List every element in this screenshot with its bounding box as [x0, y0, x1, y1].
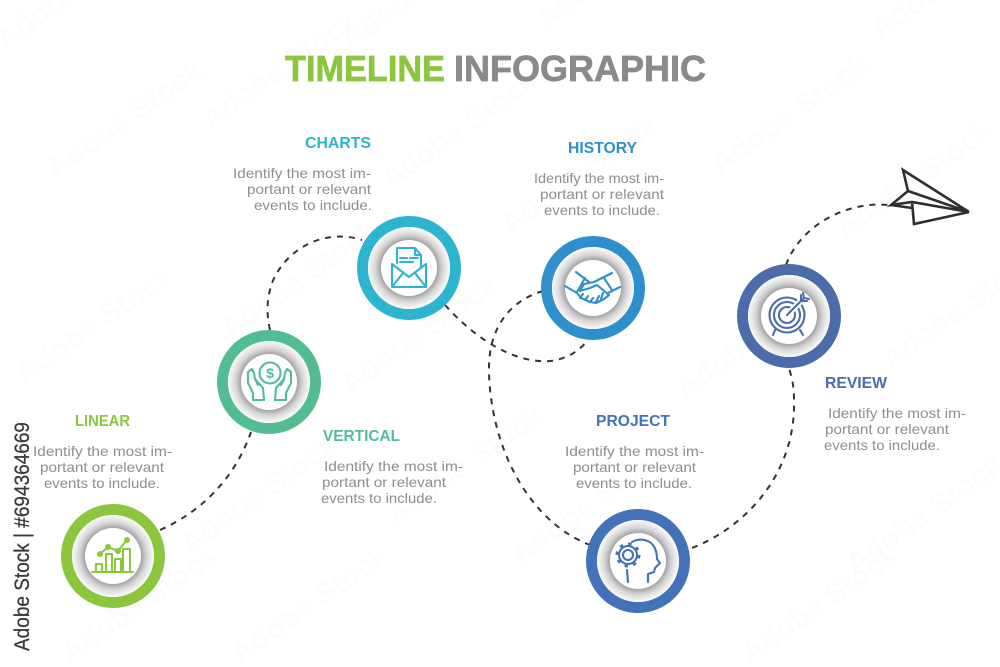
title: INFOGRAPHIC	[454, 48, 706, 89]
heading: vertical: VERTICAL	[323, 428, 400, 445]
ring: vertical	[222, 336, 316, 428]
text block: review: events to include.	[824, 437, 940, 453]
text: Adobe Stock	[215, 213, 384, 346]
step: linear	[33, 413, 172, 602]
icon: envelope with letter	[392, 248, 426, 287]
text block: vertical	[321, 458, 463, 506]
text: Adobe Stock	[225, 538, 394, 667]
dollar sign: $	[266, 365, 274, 381]
text: Adobe Stock	[375, 63, 544, 196]
text block: history: portant or relevant	[540, 186, 664, 202]
icon: growth chart	[92, 538, 133, 572]
text: Adobe Stock	[380, 398, 549, 531]
icon: handshake	[565, 272, 620, 303]
step: charts	[233, 135, 456, 314]
text: Adobe Stock	[55, 538, 224, 667]
text block: charts	[233, 165, 372, 213]
text block: vertical: Identify the most im-	[324, 458, 463, 474]
text block: charts: events to include.	[254, 197, 372, 213]
text block: charts: portant or relevant	[247, 181, 371, 197]
text block: project	[565, 443, 704, 491]
ring: history	[546, 242, 640, 334]
title: TIMELINE	[285, 48, 445, 89]
text: Adobe Stock	[175, 428, 344, 561]
heading: project: PROJECT	[596, 413, 670, 430]
heading: linear: LINEAR	[75, 413, 130, 430]
icon: paper plane	[891, 170, 969, 224]
text block: project: events to include.	[576, 475, 692, 491]
text block: history: events to include.	[544, 202, 660, 218]
text block: vertical: portant or relevant	[322, 474, 446, 490]
text block: linear: Identify the most im-	[33, 443, 172, 459]
text block: history: Identify the most im-	[534, 170, 664, 186]
heading: charts: CHARTS	[305, 135, 371, 152]
stock credit: Adobe Stock | #694364669	[11, 422, 34, 651]
icon: head with gear	[617, 540, 660, 582]
dashed timeline path	[160, 205, 888, 548]
text: Adobe Stock	[335, 268, 504, 401]
ring: review	[742, 270, 836, 362]
text block: charts: Identify the most im-	[233, 165, 371, 181]
text: Adobe Stock	[195, 3, 364, 136]
heading: history: HISTORY	[568, 140, 637, 157]
ring: project	[592, 514, 684, 608]
step: project	[565, 413, 704, 608]
text block: history	[534, 170, 664, 218]
text: Adobe Stock	[10, 258, 179, 391]
title	[285, 48, 706, 89]
text block: project: portant or relevant	[573, 459, 696, 475]
text block: linear	[33, 443, 172, 491]
text: Adobe Stock	[830, 113, 999, 246]
heading: review: REVIEW	[825, 375, 888, 392]
icon: target with arrow	[770, 293, 809, 335]
text block: linear: events to include.	[44, 475, 160, 491]
text block: vertical: events to include.	[321, 490, 437, 506]
text: Adobe Stock	[735, 538, 904, 667]
icon: hands holding dollar	[248, 362, 291, 400]
text block: review	[824, 405, 966, 453]
text block: linear: portant or relevant	[40, 459, 164, 475]
text: Adobe Stock	[670, 273, 839, 406]
text: Adobe Stock	[505, 438, 674, 571]
ring: charts	[362, 222, 456, 314]
text: Adobe Stock	[495, 108, 664, 241]
text: Adobe Stock	[705, 48, 874, 181]
step: vertical	[222, 336, 463, 506]
step: review	[742, 270, 966, 453]
text: Adobe Stock	[40, 53, 209, 186]
ring: linear	[66, 510, 160, 602]
text block: review: portant or relevant	[825, 421, 949, 437]
step: history	[534, 140, 664, 334]
text block: review: Identify the most im-	[828, 405, 966, 421]
text block: project: Identify the most im-	[565, 443, 704, 459]
